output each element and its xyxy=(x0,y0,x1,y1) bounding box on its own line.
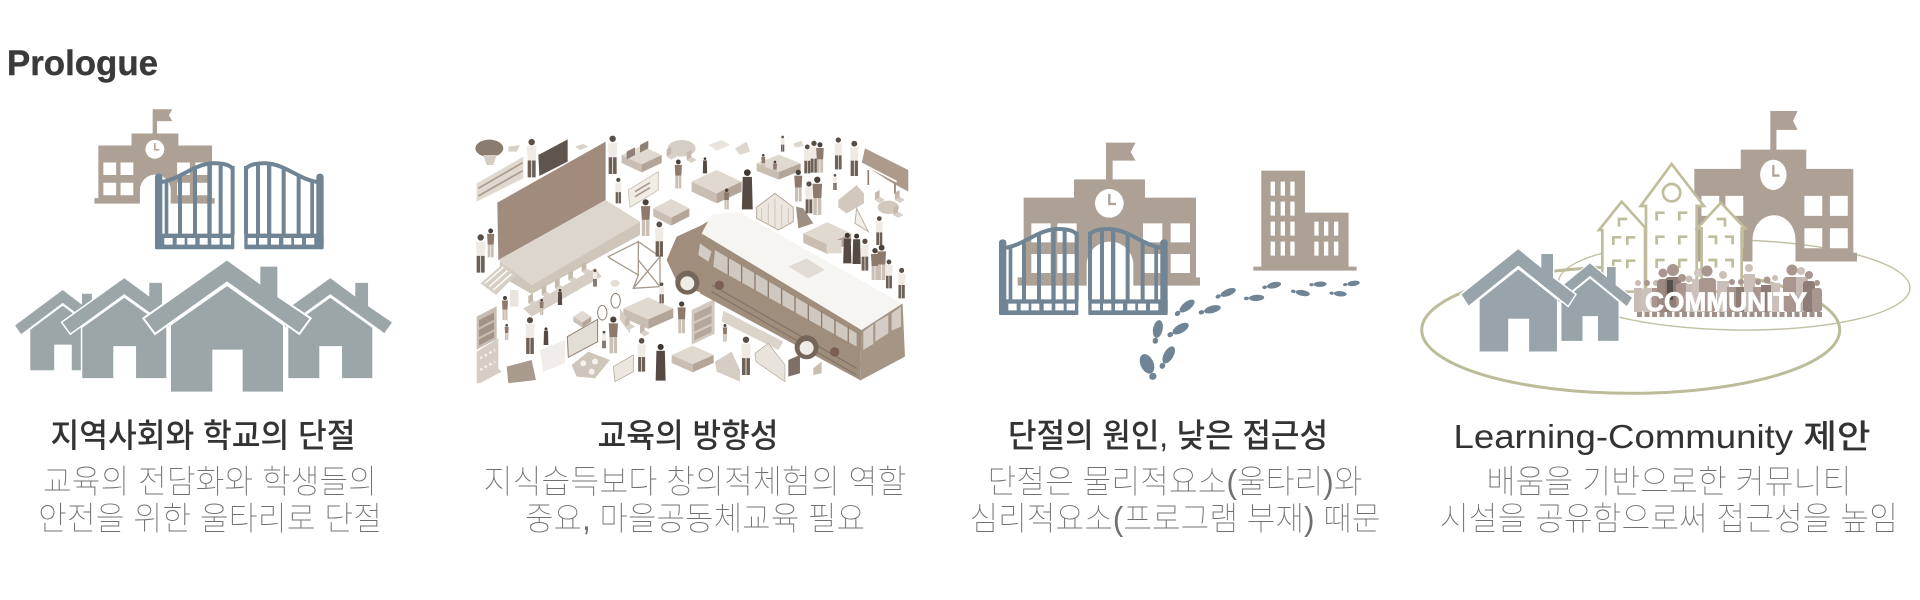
icon: townhouses xyxy=(1599,164,1745,292)
icon: school xyxy=(1689,111,1857,262)
title: Prologue: Prologue xyxy=(7,44,158,83)
panel: community and school disconnect xyxy=(14,109,393,537)
text: panel 2 description: 중요, 마을공동체교육 필요 xyxy=(525,500,865,537)
panel: cause of disconnect, low accessibility xyxy=(970,143,1380,537)
text: panel 3 description: 심리적요소(프로그램 부재) 때문 xyxy=(970,500,1380,537)
panel: Learning-Community proposal xyxy=(1422,111,1911,537)
icon: row of houses xyxy=(14,259,393,393)
icon: office building xyxy=(1253,171,1357,271)
text: panel 2 description xyxy=(484,463,906,537)
illustration: isometric learning spaces and school bus xyxy=(475,136,908,383)
panel: direction of education xyxy=(475,136,908,537)
icon: overlapping community circles xyxy=(1422,237,1911,393)
text: panel 1 description xyxy=(38,463,382,537)
text: panel 3 description xyxy=(970,463,1380,537)
icon: school behind gate xyxy=(94,109,324,249)
heading: panel 4: Learning-Community 제안 xyxy=(1454,418,1870,455)
text: panel 4 description: 시설을 공유함으로써 접근성을 높임 xyxy=(1440,500,1898,537)
text: panel 2 description: 지식습득보다 창의적체험의 역할 xyxy=(484,463,906,500)
text: panel 4 description: 배움을 기반으로한 커뮤니티 xyxy=(1486,463,1852,500)
icon: houses xyxy=(1461,248,1633,352)
heading: panel 2: 교육의 방향성 xyxy=(598,417,778,454)
icon: crowd with COMMUNITY lettering: COMMUNITY xyxy=(1645,287,1807,317)
icon: school behind gate xyxy=(999,143,1200,315)
text: panel 3 description: 단절은 물리적요소(울타리)와 xyxy=(988,463,1362,500)
text: panel 4 description xyxy=(1440,463,1898,537)
school bus xyxy=(667,212,905,381)
heading: panel 1: 지역사회와 학교의 단절 xyxy=(50,417,356,454)
heading: panel 3: 단절의 원인, 낮은 접근성 xyxy=(1008,417,1328,454)
icon: footprints leading to building xyxy=(1137,280,1360,382)
text: panel 1 description: 교육의 전담화와 학생들의 xyxy=(43,463,377,500)
icon: crowd with COMMUNITY lettering xyxy=(1634,264,1822,317)
figures xyxy=(476,136,905,381)
text: panel 1 description: 안전을 위한 울타리로 단절 xyxy=(38,500,382,537)
